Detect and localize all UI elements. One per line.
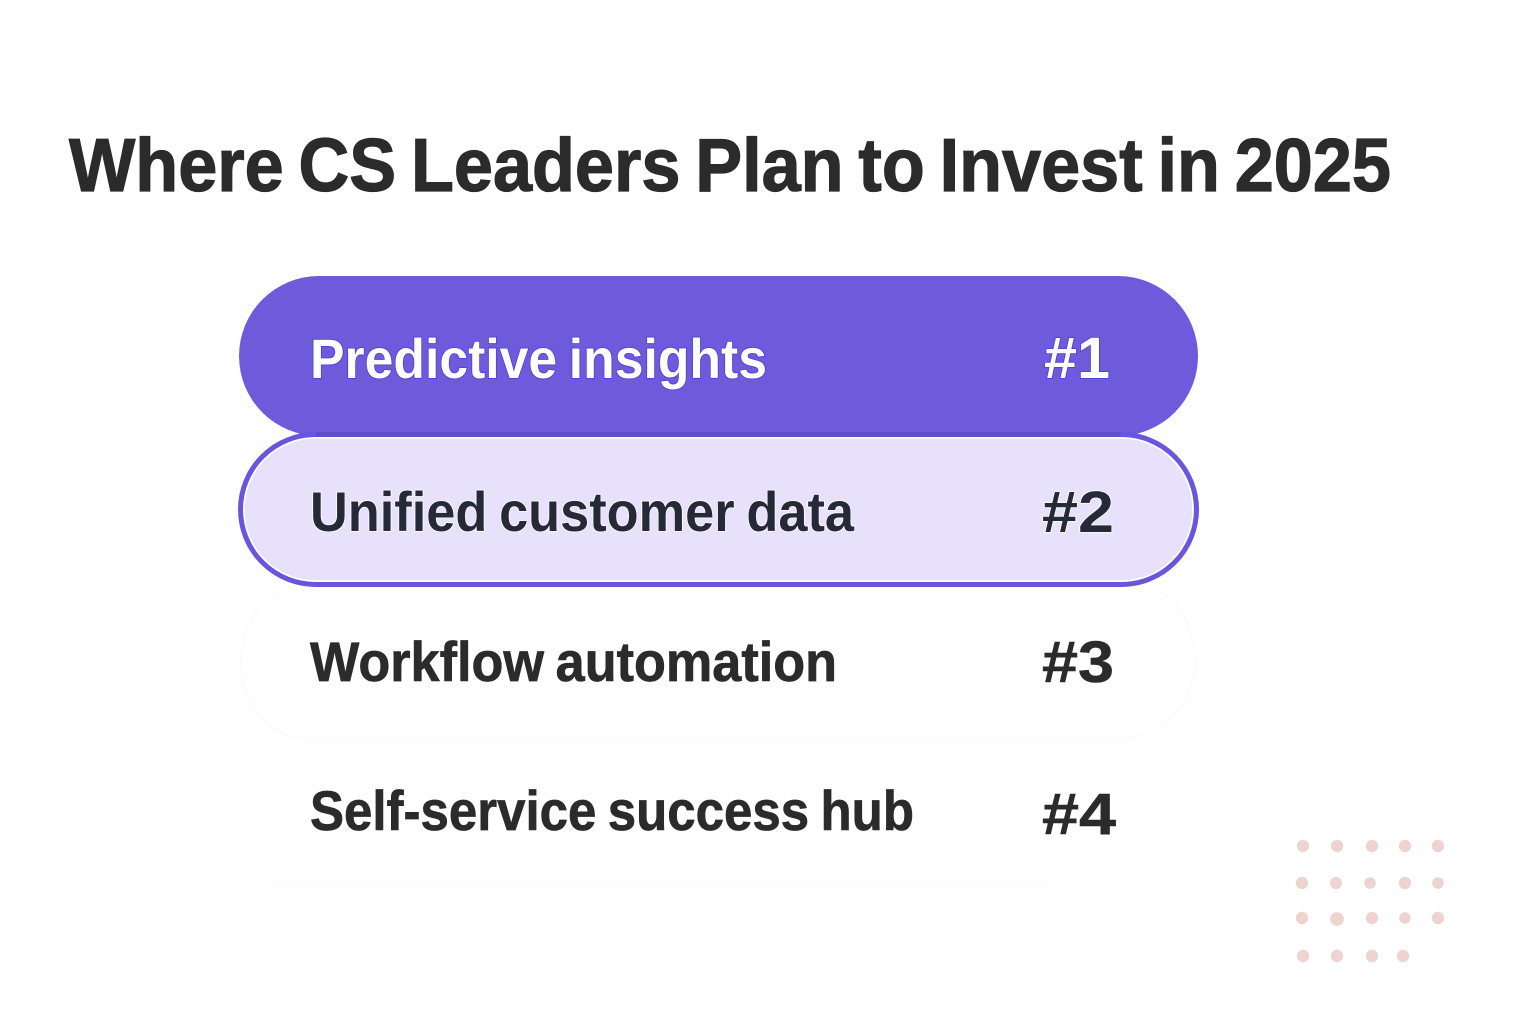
row 1: predictive insights [239,276,1198,436]
decorative dot grid [1296,840,1444,962]
row 1: predictive insights: Predictive insights [310,327,767,390]
row 3: workflow automation: #3 [1042,630,1114,695]
row 4: self-service success hub [270,779,1116,886]
row 3: workflow automation [241,592,1195,738]
row 2: unified customer data: #2 [1042,480,1114,545]
row 4: self-service success hub: #4 [1042,782,1116,847]
title: Where CS Leaders Plan to Invest in 2025 [69,123,1391,207]
row 2: unified customer data [240,434,1196,584]
row 2: unified customer data: Unified customer data [310,480,855,543]
row 3: workflow automation: Workflow automation [310,630,837,693]
row 4: self-service success hub: Self-service success hub [310,779,914,842]
row 1: predictive insights: #1 [1044,326,1110,391]
